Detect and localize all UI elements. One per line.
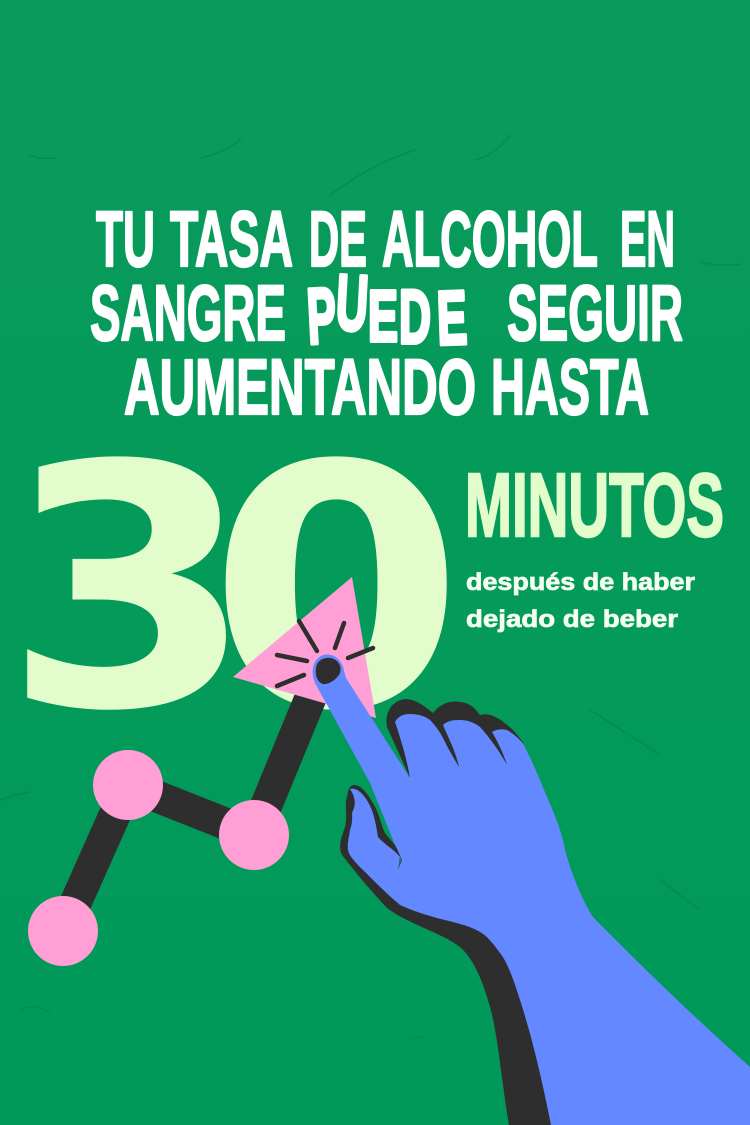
heading: E — [436, 276, 468, 361]
heading: TASA — [170, 194, 293, 283]
big number 30 — [3, 395, 464, 785]
heading — [90, 194, 683, 431]
hand pointing — [313, 654, 750, 1125]
subtext: después de haber — [466, 569, 695, 596]
hand shadow outline — [340, 699, 570, 1125]
heading: AUMENTANDO — [124, 342, 476, 431]
pink triangle marker — [233, 577, 376, 718]
big number 30: 3 — [3, 395, 255, 785]
heading: D — [399, 275, 431, 360]
icon: tap rays — [277, 621, 373, 686]
heading: HASTA — [491, 342, 649, 431]
subtext: dejado de beber — [466, 606, 678, 633]
line chart — [28, 670, 322, 966]
heading: SANGRE — [90, 268, 286, 357]
heading: TU — [96, 194, 155, 283]
subtext — [466, 569, 695, 633]
fingernail — [316, 658, 341, 684]
heading: DE — [309, 194, 367, 283]
heading: EN — [620, 194, 675, 283]
heading: E — [368, 277, 398, 357]
hand blue fill — [313, 654, 750, 1125]
big number 30: 0 — [208, 395, 464, 785]
heading: U — [334, 257, 370, 348]
heading: P — [305, 270, 338, 361]
